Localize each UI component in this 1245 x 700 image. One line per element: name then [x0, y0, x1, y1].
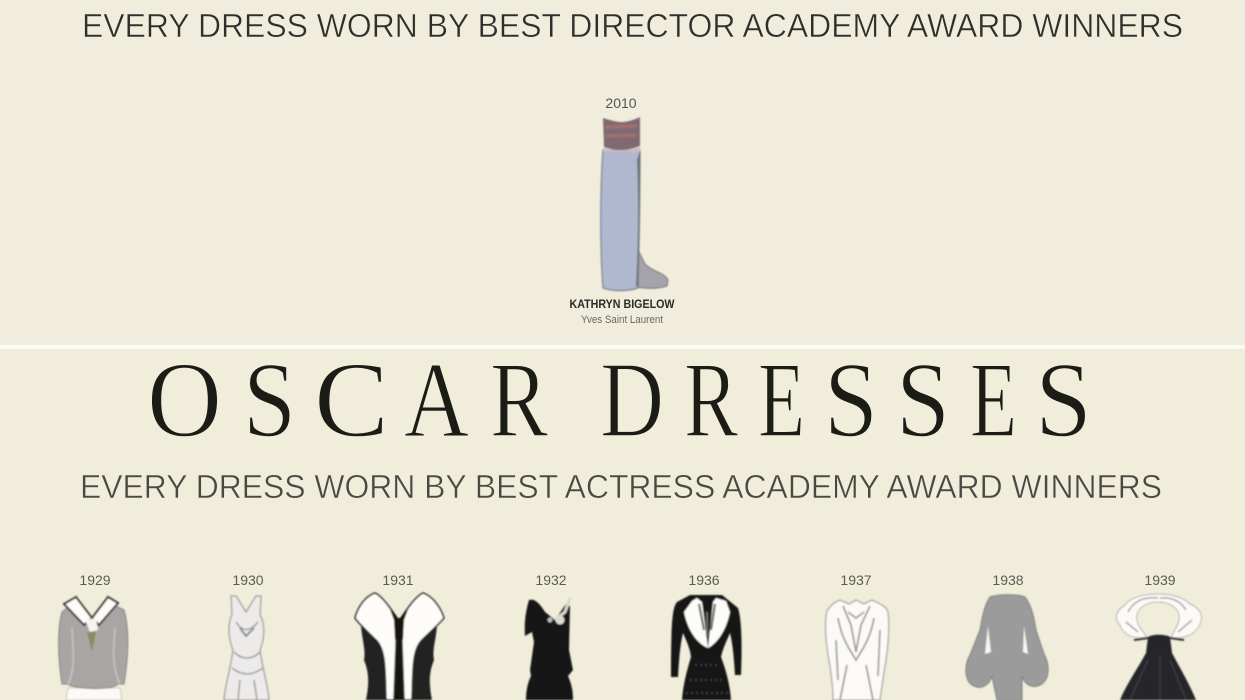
year label 2010: 2010	[605, 95, 637, 111]
year labels row: 1930	[232, 572, 264, 588]
dress: 1936	[671, 595, 742, 700]
designer: Yves Saint Laurent: Yves Saint Laurent	[581, 314, 663, 326]
title: Oscar Dresses	[147, 341, 1092, 460]
title: Oscar Dresses: S	[896, 341, 950, 460]
dress: 1931	[355, 593, 444, 700]
dress: 1932	[525, 598, 573, 700]
year labels row	[79, 572, 1176, 588]
dress: 1929	[59, 597, 128, 700]
title: Oscar Dresses: D	[600, 341, 664, 460]
year labels row: 1929	[79, 572, 111, 588]
title: Oscar Dresses: E	[970, 341, 1017, 460]
title: Oscar Dresses: C	[314, 341, 389, 460]
year labels row: 1937	[840, 572, 872, 588]
dress: 1937	[826, 600, 889, 700]
dress: 1938	[966, 595, 1048, 700]
year labels row: 1932	[535, 572, 567, 588]
top subtitle: best director: EVERY DRESS WORN BY BEST DIRECTOR ACADEMY AWARD WINNERS	[82, 7, 1183, 44]
title: Oscar Dresses: O	[147, 341, 222, 460]
dress: 1939	[1117, 594, 1202, 700]
name: Kathryn Bigelow: KATHRYN BIGELOW	[570, 297, 675, 311]
title: Oscar Dresses: E	[758, 341, 805, 460]
title: Oscar Dresses: S	[824, 341, 878, 460]
year labels row: 1938	[992, 572, 1024, 588]
title: Oscar Dresses: A	[404, 341, 469, 460]
dress: Kathryn Bigelow	[601, 117, 668, 291]
year labels row: 1931	[382, 572, 414, 588]
year labels row: 1939	[1144, 572, 1176, 588]
subtitle: best actress: EVERY DRESS WORN BY BEST ACTRESS ACADEMY AWARD WINNERS	[80, 468, 1162, 505]
title: Oscar Dresses: R	[684, 341, 738, 460]
dress: 1930	[224, 596, 269, 700]
title: Oscar Dresses: S	[243, 341, 296, 460]
title: Oscar Dresses: S	[1035, 341, 1092, 460]
panel: Kathryn Bigelow 2010 dress	[570, 95, 675, 326]
title: Oscar Dresses: R	[490, 341, 548, 460]
year labels row: 1936	[688, 572, 720, 588]
